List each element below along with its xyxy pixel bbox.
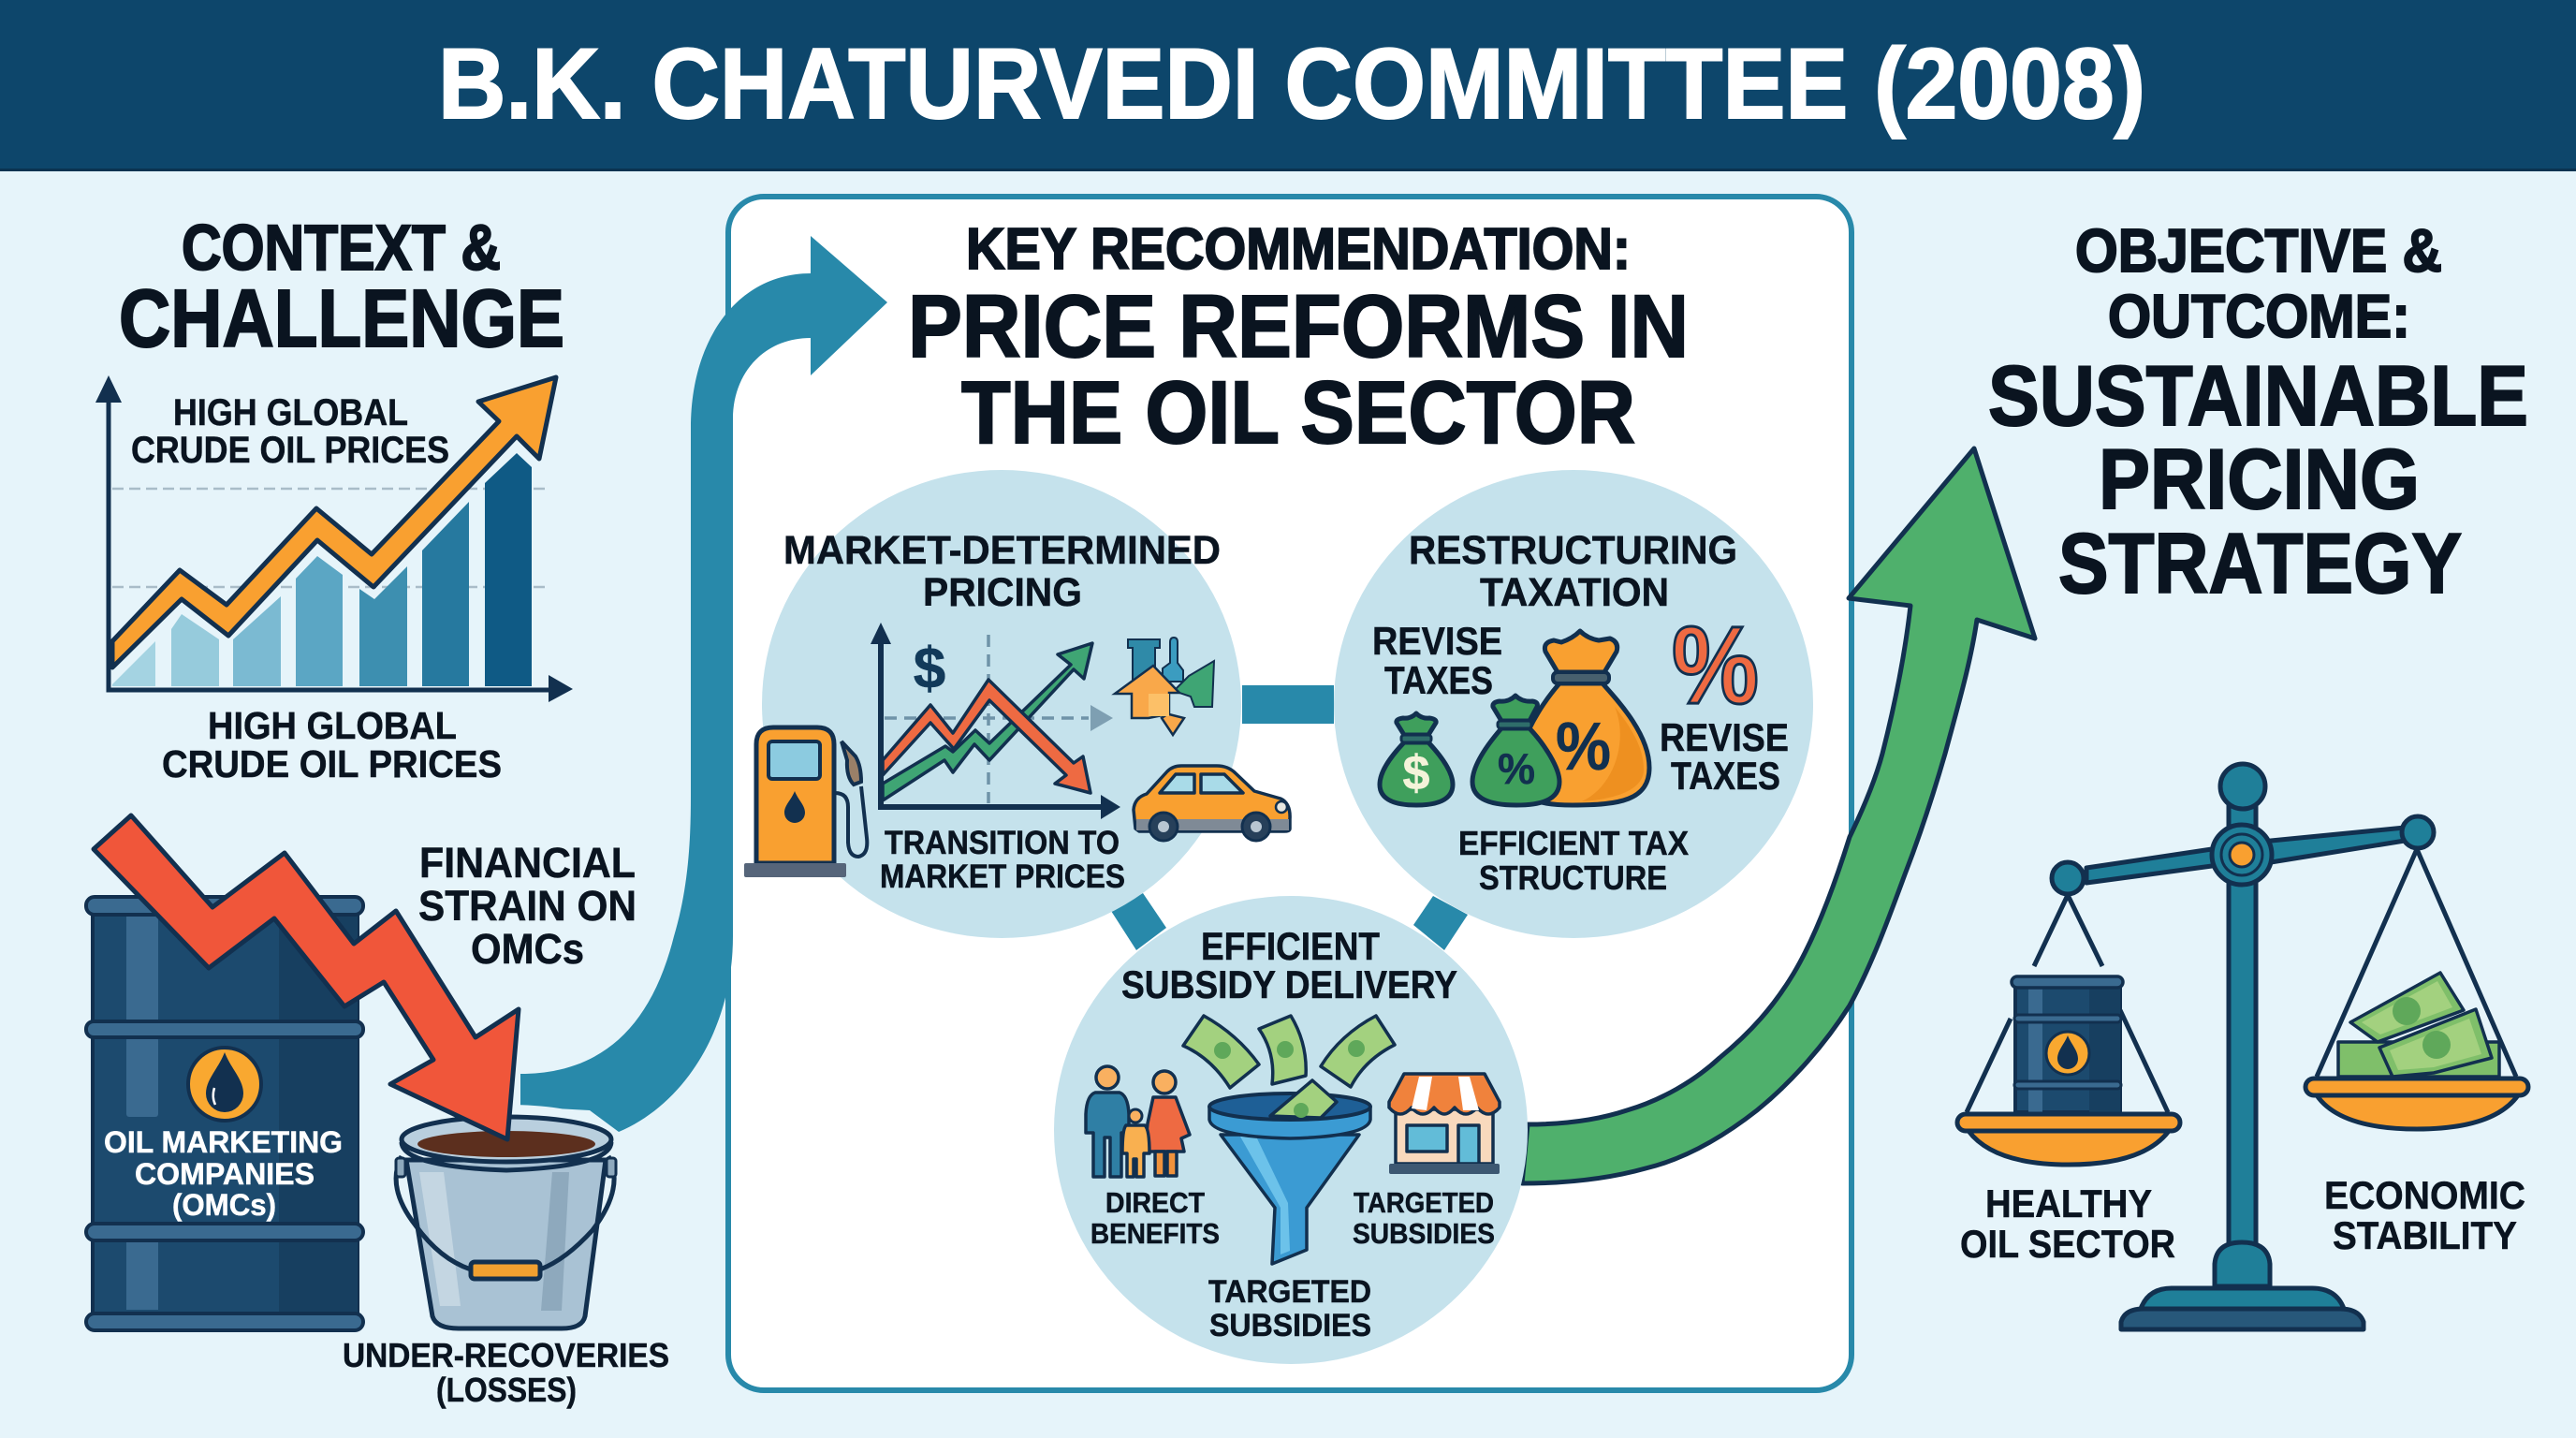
chart caption: HIGH GLOBAL xyxy=(208,704,457,747)
icon: fuel pump xyxy=(744,727,867,877)
icon: funnel xyxy=(1209,1080,1370,1264)
heading: context and challenge xyxy=(119,212,564,364)
text: financial strain: OMCs xyxy=(471,925,584,973)
label: economic stability: ECONOMIC xyxy=(2324,1173,2525,1217)
text: under-recoveries: UNDER-RECOVERIES xyxy=(343,1336,669,1374)
icon: oil drop badge xyxy=(188,1048,261,1121)
arrow: red falling arrow xyxy=(94,815,519,1139)
circle heading: TAXATION xyxy=(1480,570,1669,615)
panel: restructuring taxation xyxy=(1334,470,1813,938)
heading: objective and outcome: OBJECTIVE & xyxy=(2075,216,2442,285)
banknote stack xyxy=(2338,973,2499,1077)
icon: orange money bag xyxy=(1516,631,1649,805)
label: revise taxes right: TAXES xyxy=(1671,754,1780,798)
text: financial strain xyxy=(418,839,637,973)
left pan strings xyxy=(1967,895,2168,1112)
chart label second line: CRUDE OIL PRICES xyxy=(131,430,449,471)
barrel label xyxy=(104,1125,343,1222)
icon: green dollar bag: $ xyxy=(1403,746,1430,800)
panel: efficient subsidy delivery xyxy=(1054,896,1528,1364)
panel: key recommendation xyxy=(728,197,1852,1390)
label: healthy oil sector: HEALTHY xyxy=(1985,1181,2152,1225)
label: economic stability xyxy=(2324,1173,2525,1257)
label: healthy oil sector: OIL SECTOR xyxy=(1960,1222,2175,1266)
text: under-recoveries: (LOSSES) xyxy=(436,1371,577,1409)
circle caption: MARKET PRICES xyxy=(880,858,1125,895)
label: targeted subsidies right: SUBSIDIES xyxy=(1353,1217,1495,1250)
circle heading: EFFICIENT xyxy=(1201,924,1380,968)
market price chart xyxy=(871,623,1120,819)
heading: key recommendation xyxy=(908,217,1689,462)
market price chart: $ xyxy=(914,637,945,701)
label: revise taxes right: REVISE xyxy=(1660,715,1789,759)
label: direct benefits xyxy=(1090,1186,1220,1250)
heading: objective and outcome xyxy=(1988,216,2528,611)
arrow: teal flow from challenge to recommendation xyxy=(520,236,887,1132)
circle caption xyxy=(880,825,1125,895)
heading: objective and outcome: STRATEGY xyxy=(2058,517,2462,611)
bucket: under-recoveries xyxy=(391,1108,622,1328)
balance scale xyxy=(1957,764,2528,1329)
icon: green percent bag: % xyxy=(1498,744,1535,793)
heading: objective and outcome: SUSTAINABLE xyxy=(1988,349,2528,444)
label: revise taxes left: TAXES xyxy=(1384,658,1493,702)
chart: rising crude oil prices xyxy=(95,375,573,702)
icon: orange money bag: % xyxy=(1556,710,1611,785)
barrel: oil marketing companies xyxy=(86,897,363,1330)
circle heading: RESTRUCTURING xyxy=(1409,528,1737,573)
heading: objective and outcome: PRICING xyxy=(2099,433,2420,527)
circle caption: EFFICIENT TAX xyxy=(1458,824,1689,862)
label: targeted subsidies bottom: SUBSIDIES xyxy=(1209,1308,1371,1343)
label: revise taxes right xyxy=(1660,715,1789,798)
small oil barrel on scale xyxy=(2012,976,2123,1112)
arrow: green rising arrow to outcome xyxy=(1522,448,2035,1183)
icon: mixed arrows xyxy=(1115,638,1214,735)
circle heading xyxy=(783,528,1221,615)
label: targeted subsidies right: TARGETED xyxy=(1354,1186,1494,1219)
circle heading xyxy=(1409,528,1737,615)
icon: green percent bag xyxy=(1472,696,1559,805)
right pan strings xyxy=(2317,849,2516,1077)
circle heading: PRICING xyxy=(923,570,1082,615)
panel: market-determined pricing xyxy=(744,470,1290,938)
circle caption: STRUCTURE xyxy=(1479,858,1667,897)
label: targeted subsidies bottom: TARGETED xyxy=(1208,1274,1371,1310)
header band xyxy=(0,0,2576,171)
circle caption: TRANSITION TO xyxy=(885,825,1120,861)
icon: green dollar bag xyxy=(1380,713,1453,805)
icon: family xyxy=(1086,1066,1190,1177)
label: targeted subsidies right xyxy=(1353,1186,1495,1250)
label: direct benefits: DIRECT xyxy=(1105,1186,1205,1219)
heading: objective and outcome: OUTCOME: xyxy=(2108,282,2410,350)
heading: key recommendation: THE OIL SECTOR xyxy=(961,363,1635,462)
icon: car xyxy=(1134,766,1290,841)
label: targeted subsidies bottom xyxy=(1208,1274,1371,1343)
scale beam xyxy=(2052,816,2434,894)
label: economic stability: STABILITY xyxy=(2333,1213,2517,1257)
icon: large percent sign: % xyxy=(1672,604,1759,727)
barrel label: (OMCs) xyxy=(172,1188,276,1222)
circle heading: SUBSIDY DELIVERY xyxy=(1121,962,1457,1006)
barrel label: OIL MARKETING xyxy=(104,1125,343,1159)
label: healthy oil sector xyxy=(1960,1181,2175,1266)
label: revise taxes left: REVISE xyxy=(1372,619,1502,663)
text: under-recoveries xyxy=(343,1336,669,1409)
chart caption xyxy=(162,704,502,785)
heading: context and challenge: CHALLENGE xyxy=(119,273,564,364)
circle heading xyxy=(1121,924,1457,1006)
chart label top: HIGH GLOBAL xyxy=(173,392,408,433)
scale pole and base xyxy=(2121,764,2364,1329)
title: B.K. CHATURVEDI COMMITTEE (2008) xyxy=(438,27,2145,139)
heading: key recommendation: PRICE REFORMS IN xyxy=(908,277,1689,376)
barrel label: COMPANIES xyxy=(135,1157,315,1191)
icon: falling banknotes xyxy=(1183,1016,1395,1088)
text: financial strain: STRAIN ON xyxy=(418,882,637,930)
text: financial strain: FINANCIAL xyxy=(419,839,636,887)
label: revise taxes left xyxy=(1372,619,1502,702)
left pan xyxy=(1957,1114,2180,1165)
connectors between circles xyxy=(1111,685,1468,950)
heading: context and challenge: CONTEXT & xyxy=(182,212,501,284)
icon: store xyxy=(1389,1074,1500,1174)
chart caption: CRUDE OIL PRICES xyxy=(162,742,502,785)
label: direct benefits: BENEFITS xyxy=(1090,1217,1220,1250)
heading: key recommendation: KEY RECOMMENDATION: xyxy=(966,217,1631,282)
right pan xyxy=(2305,1078,2528,1129)
circle caption xyxy=(1458,824,1689,897)
circle heading: MARKET-DETERMINED xyxy=(783,528,1221,573)
